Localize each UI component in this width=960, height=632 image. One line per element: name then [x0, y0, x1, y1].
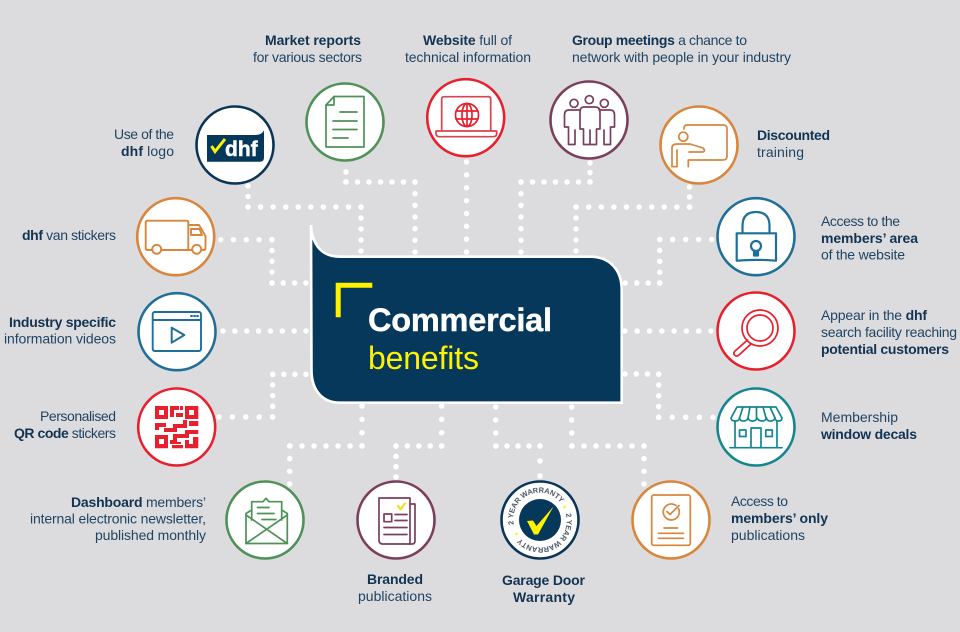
- text: garage door warranty: Warranty: [513, 589, 575, 605]
- text: search facility: potential customers: [821, 341, 949, 357]
- icon: dhf logo: [196, 106, 274, 184]
- text: market reports: Market reports: [265, 32, 361, 48]
- text: use of logo: [114, 126, 174, 159]
- connector: van stickers: [221, 240, 306, 284]
- text: QR code stickers: Personalised: [40, 408, 116, 424]
- heading: Commercial: Commercial: [368, 302, 552, 338]
- connector: dhf logo: [248, 186, 362, 252]
- connector: market reports: [346, 172, 416, 252]
- text: members only publications: Access to: [731, 493, 788, 509]
- text: website: technical information: [405, 49, 531, 65]
- text: members area: [821, 213, 918, 262]
- badge ring text: 2 YEAR WARRANTY: [508, 487, 564, 525]
- text: information videos: [4, 314, 116, 346]
- icon: envelope with letter: [226, 482, 304, 558]
- icon: document: [306, 84, 384, 160]
- icon: video player: [138, 293, 216, 370]
- text: garage door warranty: Garage Door: [502, 572, 586, 588]
- text: discounted training: Discounted: [757, 127, 830, 143]
- text: members area: of the website: [821, 246, 905, 262]
- text: dashboard: Dashboard members’: [71, 494, 206, 510]
- icon: presenter at board: [660, 106, 738, 184]
- text: garage door warranty: [502, 572, 586, 605]
- icon: QR code: [138, 388, 215, 466]
- icon: group of people: [550, 82, 628, 158]
- icon: dhf logo: dhf: [225, 138, 259, 161]
- panel: commercial benefits: [311, 225, 622, 403]
- connector: videos: [223, 328, 306, 334]
- icon: members publication: [632, 482, 710, 558]
- icon: laptop with globe: [427, 79, 504, 156]
- connector: group meetings: [520, 163, 590, 252]
- text: van stickers: dhf van stickers: [22, 227, 116, 243]
- text: group meetings: Group meetings a chance to: [572, 32, 747, 48]
- text: use of logo: dhf logo: [121, 143, 174, 159]
- badge ring text repeated: 2 YEAR WARRANTY: [516, 513, 572, 553]
- connector: warranty: [495, 406, 540, 476]
- text: window decals: Membership: [821, 409, 898, 425]
- text: information videos: information videos: [4, 330, 116, 346]
- yellow check mark: [527, 506, 554, 534]
- text: discounted training: [757, 127, 830, 160]
- text: members only publications: [731, 493, 828, 543]
- text: QR code stickers: QR code stickers: [14, 425, 116, 441]
- icon: shop front: [718, 388, 794, 466]
- text: group meetings: network with people in your industry: [572, 49, 791, 65]
- text: branded publications: Branded: [367, 571, 423, 587]
- text: market reports: for various sectors: [253, 49, 362, 65]
- connector: search: [624, 328, 711, 334]
- connector: members area: [625, 240, 712, 284]
- text: group meetings: [572, 32, 791, 65]
- text: market reports: [253, 32, 362, 65]
- icon: warranty badge: [500, 480, 580, 560]
- text: window decals: [820, 409, 917, 442]
- text: search facility: search facility reaching: [821, 324, 957, 340]
- text: search facility: Appear in the dhf: [821, 307, 927, 323]
- connector: QR stickers: [219, 374, 306, 417]
- connector: members publications: [571, 406, 644, 484]
- icon: delivery truck: [137, 198, 214, 275]
- connector: branded publications: [396, 406, 442, 477]
- icon: branded publication: [358, 482, 434, 558]
- text: search facility: [821, 307, 957, 357]
- heading: benefits: benefits: [368, 340, 479, 376]
- text: website: [405, 32, 531, 65]
- text: members only publications: members’ only: [731, 510, 828, 526]
- text: dashboard: internal electronic newsletter,: [30, 510, 206, 526]
- text: branded publications: publications: [358, 588, 432, 604]
- text: website: Website full of: [423, 32, 512, 48]
- text: members area: Access to the: [821, 213, 900, 229]
- text: dashboard: published monthly: [95, 527, 206, 543]
- text: window decals: window decals: [820, 426, 917, 442]
- text: branded publications: [358, 571, 432, 604]
- icon: magnifying glass: [718, 292, 794, 370]
- connector: dashboard: [290, 406, 362, 484]
- yellow corner bracket: [338, 285, 372, 317]
- text: discounted training: training: [757, 144, 804, 160]
- text: QR code stickers: [14, 408, 116, 441]
- text: members area: members’ area: [821, 230, 918, 246]
- text: information videos: Industry specific: [9, 314, 116, 330]
- text: dashboard: [30, 494, 206, 543]
- connector: training: [576, 187, 690, 252]
- connector: website: [464, 162, 469, 252]
- text: members only publications: publications: [731, 527, 805, 543]
- connector: window decals: [624, 374, 713, 417]
- text: use of logo: Use of the: [114, 126, 174, 142]
- icon: padlock: [718, 198, 794, 275]
